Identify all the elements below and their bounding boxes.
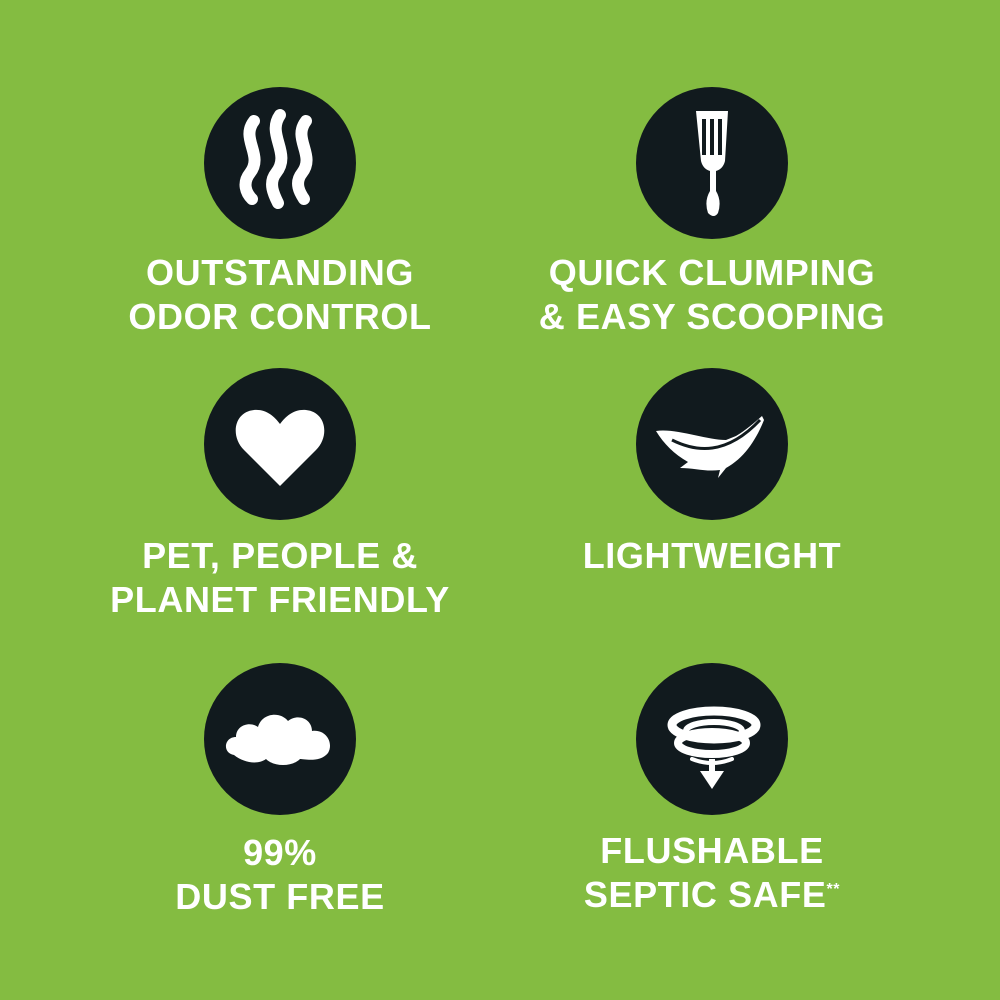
text: odor control (128, 252, 432, 337)
text: friendly: PLANET FRIENDLY (110, 579, 450, 620)
text: dust free: DUST FREE (175, 876, 385, 917)
icon: heart (204, 368, 356, 520)
text: dust free (175, 832, 385, 917)
icon: feather (636, 368, 788, 520)
text: odor control: OUTSTANDING (146, 252, 414, 293)
icon: odor waves (204, 87, 356, 239)
text: friendly (110, 535, 450, 620)
text: odor control: ODOR CONTROL (128, 296, 432, 337)
text: lightweight: LIGHTWEIGHT (583, 535, 841, 576)
text: flushable: SEPTIC SAFE** (584, 874, 840, 915)
text: flushable (584, 830, 840, 915)
text: clumping: & EASY SCOOPING (539, 296, 885, 337)
icon: cloud (204, 663, 356, 815)
text: dust free: 99% (243, 832, 317, 873)
text: clumping: QUICK CLUMPING (549, 252, 875, 293)
text: clumping (539, 252, 885, 337)
icon: flush swirl (636, 663, 788, 815)
text: friendly: PET, PEOPLE & (142, 535, 418, 576)
text: flushable: FLUSHABLE (600, 830, 824, 871)
icon: scoop (636, 87, 788, 239)
